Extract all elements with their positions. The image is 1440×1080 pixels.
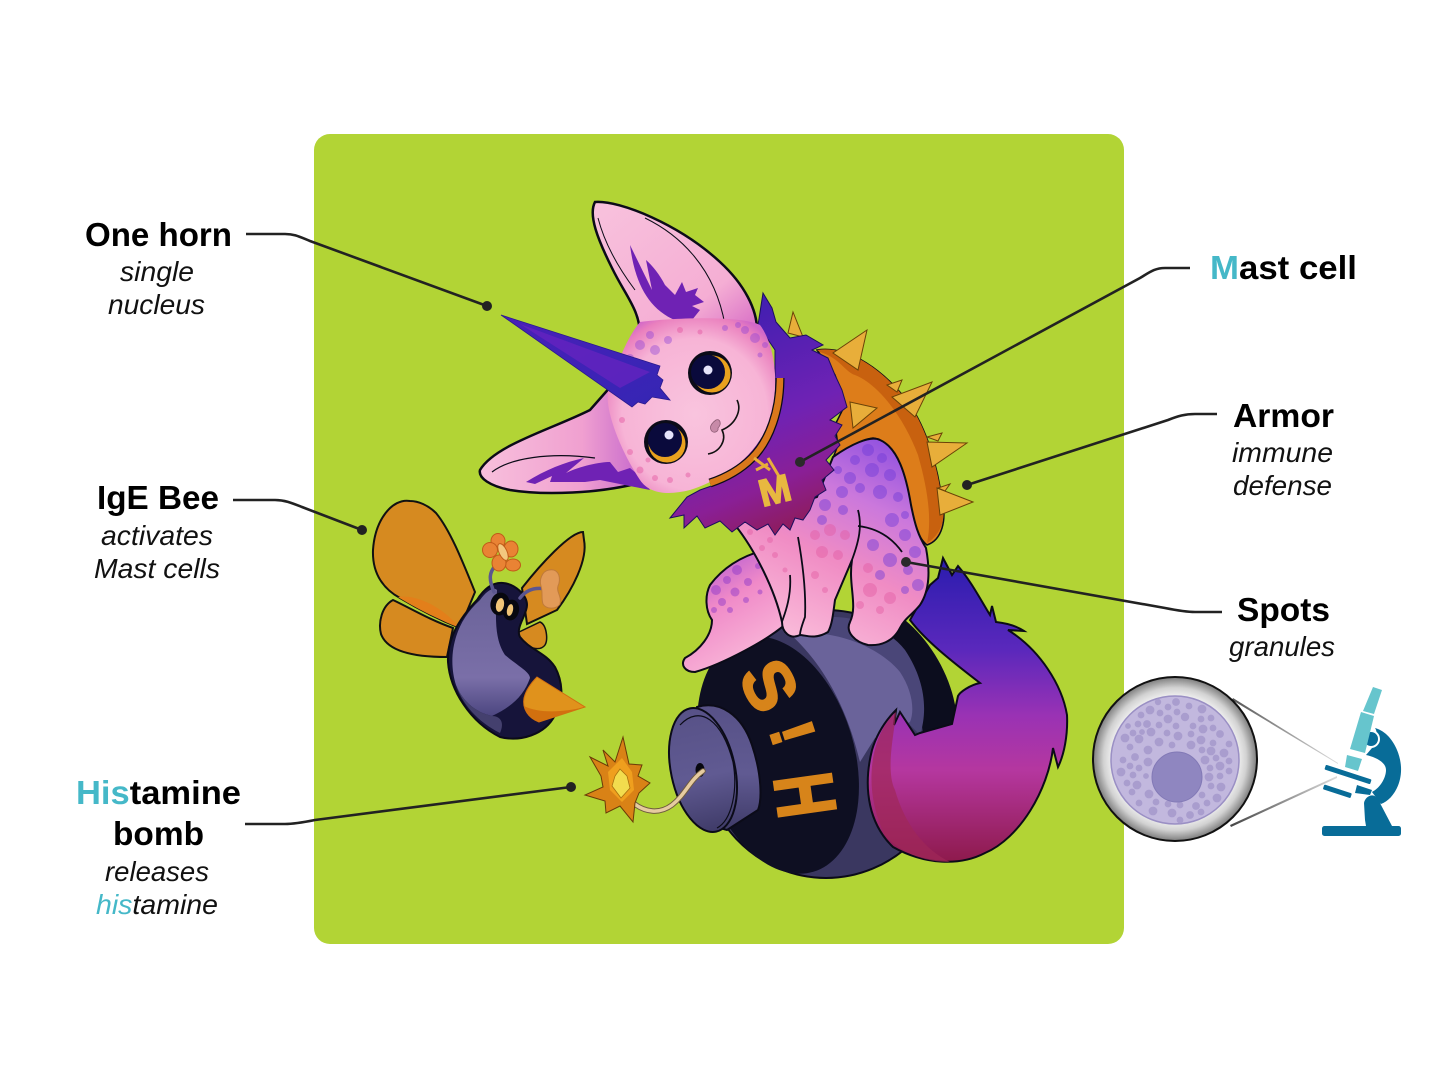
label: IgE Bee: activates [101,520,213,551]
label: Histamine bomb: histamine [96,889,218,920]
label: Armor [1232,397,1334,501]
magnifier rays [1230,698,1338,827]
leader: IgE bee [233,500,367,535]
bomb letter exclamation: ! [756,713,828,754]
bee peanut [540,570,560,608]
microscope foot [1348,785,1392,826]
bee flower [482,534,520,571]
label: Histamine bomb: bomb [113,815,204,852]
bee lower left wing [380,600,453,657]
bomb dark face [670,616,886,894]
icon: mast cell cat [480,202,1067,862]
cat collar [710,378,780,483]
label: Histamine bomb: releases [105,856,209,887]
cat armor [817,349,944,545]
label: IgE Bee: Mast cells [94,553,220,584]
cat left ear [480,385,650,493]
leader lines and dots [233,234,1222,824]
cat spots on far leg [711,563,762,613]
label: Armor: immune [1232,437,1333,468]
label: IgE Bee: IgE Bee [97,479,219,516]
magnified cell with microscope [1093,677,1401,841]
label: One horn: single [120,256,194,287]
cat lower eye [644,420,688,464]
cat upper eye [688,351,732,395]
icon: histamine bomb [585,610,957,894]
label: Mast cell: Mast cell [1210,249,1357,286]
label: Armor: Armor [1233,397,1334,434]
leader: one horn [246,234,492,311]
icon: IgE bee character [373,501,585,739]
lens circle [1093,677,1257,841]
bomb letter H: H [755,767,854,823]
bomb fuse [632,771,703,811]
label: Histamine bomb [76,774,241,920]
label: IgE Bee [94,479,220,584]
label: One horn: nucleus [108,289,205,320]
cat left ear inner fur [526,458,650,490]
label: One horn: One horn [85,216,232,253]
bee upper left wing [373,501,475,628]
cat nose and mouth [710,420,720,432]
cat far hind leg [683,550,790,672]
bomb neck and cap [690,705,760,830]
cat granule spots [747,444,924,614]
label: Spots: Spots [1237,591,1330,628]
cell nucleus [1152,752,1202,802]
cat head [608,318,775,493]
leader: spots [901,557,1222,612]
label: Armor: defense [1233,470,1332,501]
cat horn [501,315,670,407]
cell [1111,696,1239,824]
bee antennae [490,566,546,598]
leader: armor [962,414,1217,490]
label: Spots: granules [1229,631,1335,662]
bee eyes [488,591,512,617]
bomb letter S: S [724,647,815,724]
leader: mast cell [795,268,1190,467]
bomb body [699,610,953,878]
bomb spark [585,737,650,822]
label: Spots [1229,591,1335,662]
cat tail [868,558,1067,862]
cat leg lines [782,510,902,635]
bee body [448,583,561,739]
panel: green background [314,134,1124,944]
cat collar M tag: M [755,467,796,516]
microscope base [1322,826,1401,836]
bee right wings [522,532,585,624]
bomb rear dark band [870,618,957,770]
cat torso and front legs [735,439,928,645]
microscope arm [1366,728,1401,804]
cat top ear [593,202,757,335]
label: One horn [85,216,232,320]
microscope stage [1323,765,1372,798]
bee stinger [524,677,585,722]
leader: histamine bomb [245,782,576,824]
cat fur ruff [670,293,847,535]
microscope tube [1345,687,1382,771]
cat armor spikes [788,312,973,515]
cat head spots [619,322,768,483]
cat top ear inner fur [630,245,704,322]
label: Histamine bomb: Histamine [76,774,241,811]
icon: microscope [1322,687,1401,836]
